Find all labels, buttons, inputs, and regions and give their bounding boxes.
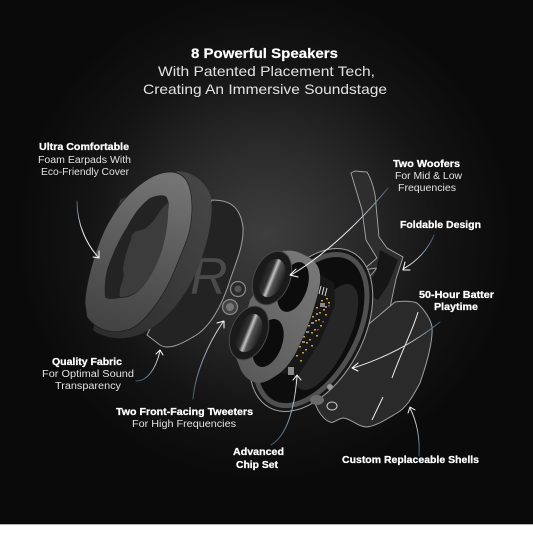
arrow: battery: [352, 322, 440, 371]
tweeter drivers: [222, 282, 246, 314]
title: Creating An Immersive Soundstage: [143, 81, 387, 97]
arrow: chip set: [271, 375, 301, 445]
title: 8 Powerful Speakers: [191, 45, 338, 61]
headband hinge shadow: [362, 250, 398, 300]
label: quality fabric: For Optimal Sound: [42, 369, 134, 380]
arrow: shells: [408, 407, 419, 456]
label: ultra comfortable: Foam Earpads With: [38, 155, 131, 166]
label: battery: 50-Hour Batter: [419, 290, 494, 301]
label: ultra comfortable: Eco-Friendly Cover: [41, 167, 130, 178]
fabric mesh disc: [147, 200, 243, 347]
label: tweeters: [116, 407, 253, 430]
replaceable shell: [315, 301, 432, 427]
label: quality fabric: [42, 357, 134, 392]
bottom edge line: [0, 524, 533, 525]
label: ultra comfortable: Ultra Comfortable: [39, 142, 129, 153]
arrow: tweeters: [193, 321, 224, 399]
label: tweeters: Two Front-Facing Tweeters: [116, 407, 253, 418]
driver mounting plate: [235, 251, 320, 383]
driver housing frame: [224, 228, 398, 432]
label: chip set: Chip Set: [236, 460, 279, 471]
arrow: quality fabric: [136, 350, 163, 381]
arrow: earpad: [77, 201, 99, 258]
label: foldable design: Foldable Design: [400, 220, 481, 231]
earpad: [85, 171, 212, 338]
circuit board chip set: [276, 273, 335, 376]
label: tweeters: For High Frequencies: [132, 419, 236, 430]
label: two woofers: Two Woofers: [393, 159, 460, 170]
label: battery: Playtime: [434, 302, 478, 313]
woofer upper: [245, 245, 299, 311]
label: shells: Custom Replaceable Shells: [342, 455, 479, 466]
arrow: woofers: [290, 188, 388, 277]
label: quality fabric: Transparency: [55, 381, 121, 392]
label: battery: [419, 290, 494, 313]
label: two woofers: [393, 159, 463, 194]
headband arm: [351, 171, 403, 371]
arrow: foldable design: [403, 235, 434, 270]
woofer lower: [222, 300, 276, 366]
title: With Patented Placement Tech,: [158, 63, 375, 79]
label: ultra comfortable: [38, 142, 131, 178]
label: two woofers: For Mid & Low: [395, 171, 463, 182]
label: chip set: [233, 447, 284, 471]
label: two woofers: Frequencies: [398, 183, 456, 194]
plate openings: [246, 258, 315, 371]
label: quality fabric: Quality Fabric: [52, 357, 122, 368]
fabric mesh disc: R: [190, 248, 228, 306]
label: chip set: Advanced: [233, 447, 284, 458]
title: [143, 45, 387, 97]
